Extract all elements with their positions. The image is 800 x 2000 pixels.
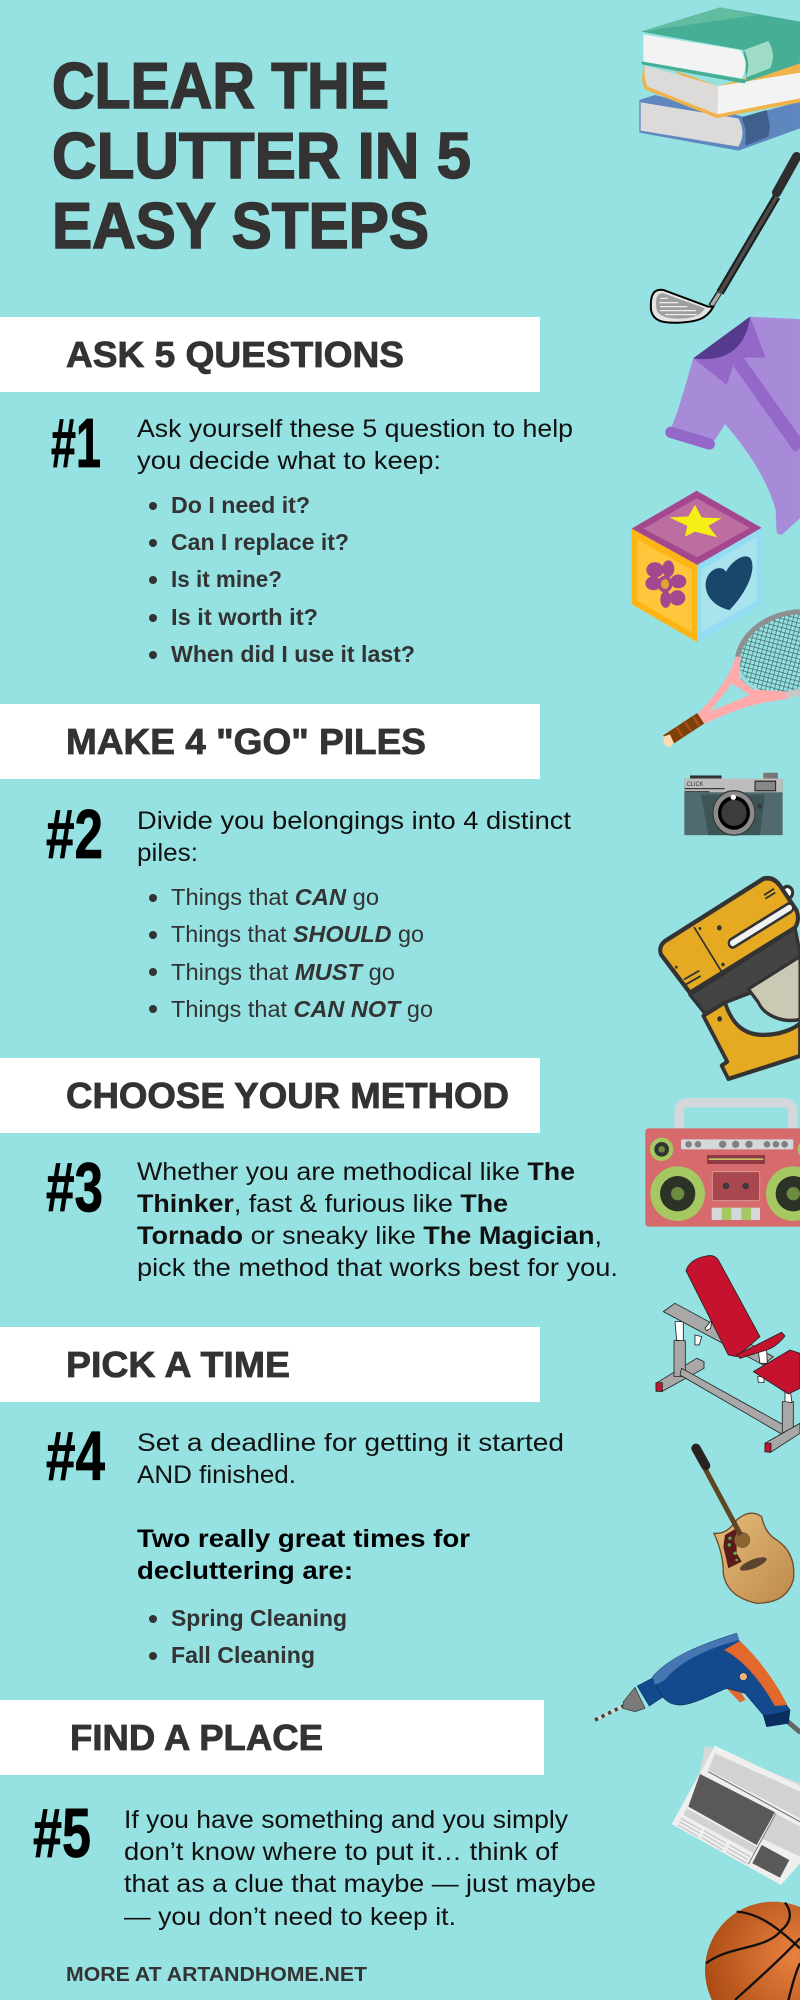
intro text: Divide you belongings into 4 distinct bbox=[137, 807, 571, 835]
footer credit: MORE AT ARTANDHOME.NET bbox=[66, 1964, 367, 1986]
question list: Do I need it? bbox=[171, 492, 310, 518]
intro text: you decide what to keep: bbox=[137, 447, 441, 475]
icon: toy block bbox=[632, 491, 762, 642]
panel: step 4 bbox=[0, 1327, 564, 1668]
method text: Whether you are methodical like The bbox=[137, 1158, 575, 1186]
piles list: Things that SHOULD go bbox=[171, 921, 424, 947]
icon: stand mixer bbox=[660, 878, 800, 1079]
method text: pick the method that works best for you. bbox=[137, 1254, 618, 1282]
step number 4: #4 bbox=[46, 1417, 105, 1495]
question list: Is it worth it? bbox=[171, 604, 318, 630]
great times text: Two really great times for bbox=[137, 1525, 470, 1553]
great times text bbox=[137, 1525, 470, 1585]
icon: golf club bbox=[651, 157, 797, 323]
great times text: decluttering are: bbox=[137, 1557, 353, 1585]
panel: step 2 bbox=[0, 704, 571, 1022]
icon: purple shirt bbox=[671, 317, 800, 535]
piles list bbox=[149, 884, 433, 1022]
deadline text bbox=[137, 1429, 564, 1489]
heading bar: pick a time bbox=[0, 1327, 540, 1402]
place text bbox=[124, 1806, 596, 1931]
icon: camera: CLICK bbox=[687, 781, 703, 788]
title: EASY STEPS bbox=[52, 189, 429, 262]
title: CLEAR THE bbox=[52, 49, 389, 122]
piles list: Things that CAN go bbox=[171, 884, 379, 910]
icon: basketball bbox=[705, 1902, 800, 2000]
place text: If you have something and you simply bbox=[124, 1806, 569, 1834]
panel: step 3 bbox=[0, 1058, 618, 1282]
icon: power drill bbox=[595, 1633, 800, 1733]
icon: tennis racket bbox=[663, 602, 800, 748]
heading bar: pick a time: PICK A TIME bbox=[66, 1344, 290, 1385]
method text: Tornado or sneaky like The Magician , bbox=[137, 1222, 602, 1250]
heading bar: choose your method bbox=[0, 1058, 540, 1133]
heading bar: find a place: FIND A PLACE bbox=[70, 1717, 323, 1758]
step number 3: #3 bbox=[46, 1148, 103, 1226]
step number 5: #5 bbox=[33, 1794, 91, 1872]
step number 2: #2 bbox=[46, 795, 103, 873]
seasons list: Fall Cleaning bbox=[171, 1642, 315, 1668]
intro text bbox=[137, 415, 573, 475]
panel: step 1 bbox=[0, 317, 573, 667]
seasons list bbox=[149, 1605, 347, 1668]
question list: Is it mine? bbox=[171, 566, 282, 592]
heading bar: make 4 go piles bbox=[0, 704, 540, 779]
method text: Thinker , fast & furious like The bbox=[137, 1190, 508, 1218]
step number 1: #1 bbox=[51, 404, 101, 482]
heading bar: find a place bbox=[0, 1700, 544, 1775]
heading bar: choose your method: CHOOSE YOUR METHOD bbox=[66, 1075, 509, 1116]
deadline text: Set a deadline for getting it started bbox=[137, 1429, 564, 1457]
place text: that as a clue that maybe — just maybe bbox=[124, 1870, 596, 1898]
heading bar: ask 5 questions bbox=[0, 317, 540, 392]
title bbox=[52, 49, 471, 262]
intro text: piles: bbox=[137, 839, 198, 867]
icon: camera bbox=[684, 773, 783, 835]
piles list: Things that MUST go bbox=[171, 959, 395, 985]
panel: step 5 bbox=[0, 1700, 596, 1931]
piles list: Things that CAN NOT go bbox=[171, 996, 433, 1022]
icon: weight bench bbox=[656, 1256, 800, 1453]
title: CLUTTER IN 5 bbox=[52, 119, 471, 192]
place text: — you don’t need to keep it. bbox=[124, 1903, 456, 1931]
place text: don’t know where to put it… think of bbox=[124, 1838, 558, 1866]
intro text bbox=[137, 807, 571, 867]
icon: newspaper bbox=[672, 1746, 800, 1885]
seasons list: Spring Cleaning bbox=[171, 1605, 347, 1631]
intro text: Ask yourself these 5 question to help bbox=[137, 415, 573, 443]
question list: Can I replace it? bbox=[171, 529, 349, 555]
heading bar: ask 5 questions: ASK 5 QUESTIONS bbox=[66, 334, 404, 375]
icon: books bbox=[639, 7, 800, 151]
icon: guitar bbox=[696, 1448, 794, 1603]
icon: boombox bbox=[645, 1103, 800, 1227]
method text bbox=[137, 1158, 618, 1282]
question list bbox=[149, 492, 415, 667]
deadline text: AND finished. bbox=[137, 1461, 296, 1489]
question list: When did I use it last? bbox=[171, 641, 415, 667]
heading bar: make 4 go piles: MAKE 4 "GO" PILES bbox=[66, 721, 426, 762]
